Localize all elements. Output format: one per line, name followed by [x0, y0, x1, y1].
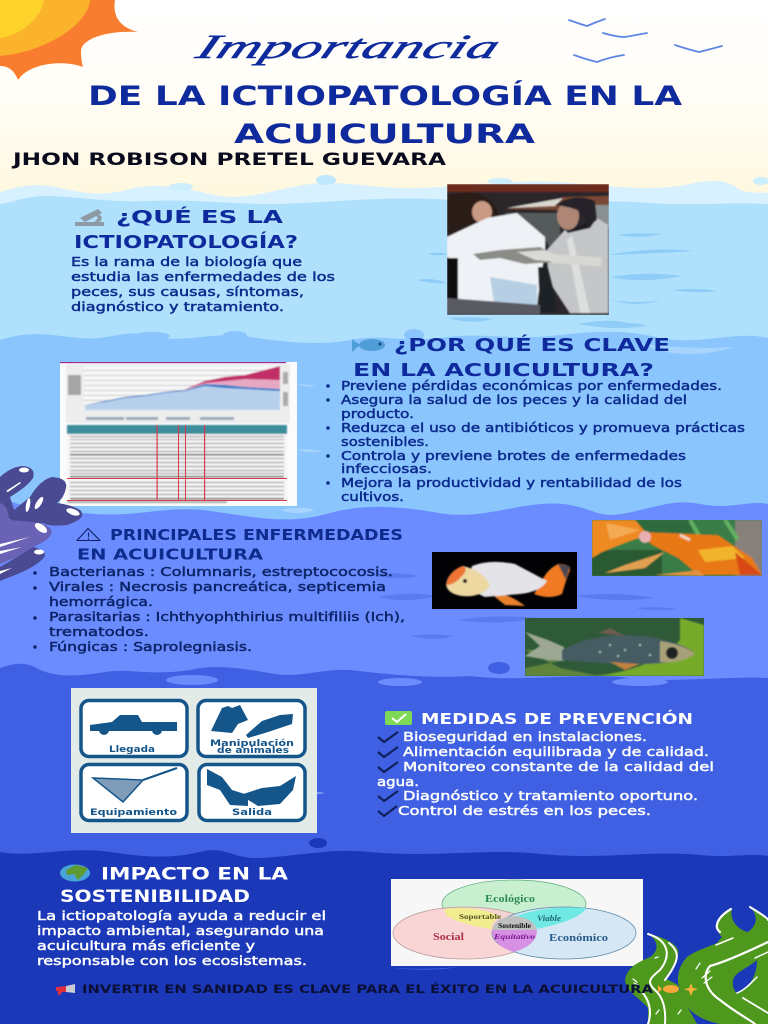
icon: net — [90, 768, 177, 818]
bullet list: reasons: Mejora la productividad y rentabilidad de los — [341, 475, 682, 490]
list: measures: Control de estrés en los peces. — [398, 803, 651, 818]
pictogram panel: biosecurity steps — [71, 688, 317, 833]
text: definition: peces, sus causas, síntomas, — [71, 284, 304, 299]
icon: washing hands — [207, 769, 296, 818]
heading: why — [353, 334, 670, 381]
area chart — [66, 364, 290, 423]
icon: flying birds — [569, 19, 722, 62]
decoration: purple coral — [0, 466, 82, 581]
bullet list: diseases: Bacterianas : Columnaris, estreptococosis. — [49, 564, 393, 579]
section: sustainability impact — [37, 864, 326, 968]
photo: orange fish with lesion — [592, 520, 762, 576]
text: impact: impacto ambiental, asegurando una — [37, 923, 324, 938]
heading: impact — [60, 864, 288, 906]
bullet list: reasons — [326, 378, 745, 504]
icon: green check — [385, 711, 412, 725]
icon: pickup truck: Llegada — [109, 745, 155, 755]
bullet list: reasons: producto. — [341, 406, 414, 421]
main heading: ACUICULTURA — [234, 119, 535, 150]
bullet list: reasons: infecciosas. — [341, 461, 432, 476]
list: measures: Monitoreo constante de la calidad del — [403, 759, 714, 774]
venn diagram: sustainability: Social — [433, 931, 464, 943]
venn diagram: sustainability: Sostenible — [498, 922, 531, 930]
text: impact — [37, 908, 326, 968]
icon: megaphone — [56, 984, 75, 995]
footer text: INVERTIR EN SANIDAD ES CLAVE PARA EL ÉXITO EN LA ACUICULTURA — [82, 981, 653, 996]
text: definition: estudia las enfermedades de los — [71, 269, 335, 284]
heading: impact: SOSTENIBILIDAD — [60, 887, 250, 906]
venn diagram: sustainability: Ecológico — [485, 893, 536, 905]
heading: what is: ICTIOPATOLOGÍA? — [74, 231, 298, 253]
section: main diseases — [33, 526, 405, 654]
bullet list: reasons: Previene pérdidas económicas por enfermedades. — [341, 378, 722, 393]
list: measures: Bioseguridad en instalaciones. — [403, 729, 647, 744]
heading: impact: IMPACTO EN LA — [101, 864, 288, 884]
data table — [67, 425, 287, 503]
text: definition: Es la rama de la biología que — [71, 254, 302, 269]
venn diagram: sustainability: Soportable — [459, 912, 502, 921]
section: what is ichthyopathology — [71, 206, 335, 314]
list: measures: Alimentación equilibrada y de calidad. — [403, 744, 709, 759]
check marks — [378, 732, 398, 816]
list: measures: agua. — [377, 774, 419, 789]
bullet list: reasons: Controla y previene brotes de enfermedades — [341, 448, 686, 463]
icon: net: Equipamiento — [90, 808, 177, 818]
bullet list: reasons: cultivos. — [341, 489, 404, 504]
heading: diseases — [77, 526, 403, 564]
icon: fish — [352, 339, 385, 352]
list: measures — [377, 729, 714, 818]
bullet list: diseases: trematodos. — [49, 624, 149, 639]
chart image: production area chart and table — [60, 362, 297, 506]
text: impact: acuicultura más eficiente y — [37, 938, 256, 953]
section: why it is key — [326, 334, 745, 504]
icon: microscope — [75, 209, 104, 226]
venn diagram: sustainability — [391, 879, 643, 966]
list: measures: Diagnóstico y tratamiento oportuno. — [403, 788, 698, 803]
icon: washing hands: Salida — [232, 808, 272, 818]
section: prevention measures — [377, 709, 714, 818]
bullet list: diseases: hemorrágica. — [49, 594, 153, 609]
icon: gloves — [210, 705, 294, 756]
main heading — [88, 80, 682, 150]
bullet list: reasons: Asegura la salud de los peces y la calidad del — [341, 392, 687, 407]
heading: diseases: EN ACUICULTURA — [77, 546, 263, 564]
heading: why: EN LA ACUICULTURA? — [353, 360, 654, 381]
title script: Importancia — [189, 27, 506, 66]
author: JHON ROBISON PRETEL GUEVARA — [12, 150, 447, 170]
heading: prevention: MEDIDAS DE PREVENCIÓN — [421, 709, 693, 728]
photo: researchers examining a fish — [447, 184, 609, 315]
heading: what is: ¿QUÉ ES LA — [116, 206, 283, 228]
text: impact: responsable con los ecosistemas. — [37, 953, 307, 968]
bullet list: diseases: Parasitarias : Ichthyophthirius multifiliis (Ich), — [49, 609, 405, 624]
bullet list: reasons: Reduzca el uso de antibióticos y promueva prácticas — [341, 420, 745, 435]
main heading: DE LA ICTIOPATOLOGÍA EN LA — [88, 80, 682, 112]
heading: diseases: PRINCIPALES ENFERMEDADES — [110, 526, 403, 544]
icon: pickup truck — [90, 715, 177, 755]
icon: gloves: de animales — [217, 746, 289, 756]
icon: sun — [0, 0, 138, 80]
icon: warning triangle — [77, 528, 100, 540]
water ripples — [370, 573, 677, 639]
photo: goldfish on black — [432, 552, 577, 609]
icon: gloves: Manipulación — [210, 738, 294, 749]
venn diagram: sustainability: Económico — [549, 932, 609, 944]
icon: fish and sparkles — [658, 983, 698, 996]
heading: why: ¿POR QUÉ ES CLAVE — [394, 334, 670, 356]
decoration: green seaweed — [625, 907, 768, 1024]
footer message — [56, 981, 698, 996]
icon: globe — [60, 864, 90, 882]
bullet list: diseases — [33, 564, 405, 654]
heading: what is — [74, 206, 298, 253]
venn diagram: sustainability: Equitativo — [493, 932, 535, 941]
bullet list: diseases: Virales : Necrosis pancreática, septicemia — [49, 579, 386, 594]
venn diagram: sustainability: Viable — [537, 914, 562, 923]
bullet list: diseases: Fúngicas : Saprolegniasis. — [49, 639, 252, 654]
text: impact: La ictiopatología ayuda a reducir el — [37, 908, 326, 923]
water ripples — [417, 233, 717, 328]
text: definition: diagnóstico y tratamiento. — [71, 299, 284, 314]
text: definition — [71, 254, 335, 314]
red highlight lines — [67, 425, 287, 501]
photo: spotted fish in green water — [525, 618, 704, 676]
bullet list: reasons: sostenibles. — [341, 434, 429, 449]
